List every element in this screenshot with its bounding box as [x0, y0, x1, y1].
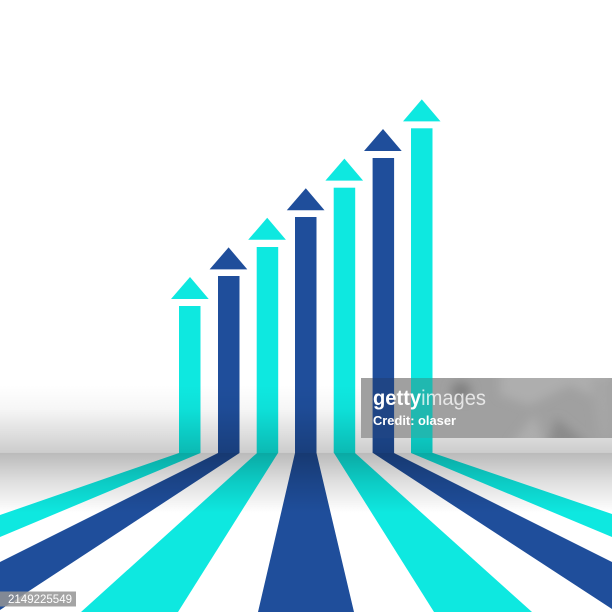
wall shadow: [0, 385, 612, 453]
watermark panel: [361, 378, 612, 438]
arrow 7: [403, 99, 440, 453]
watermark credit: Credit: olaser: [373, 413, 456, 428]
arrow 5: [325, 159, 363, 453]
arrow 1: [171, 277, 209, 453]
image id tag: 2149225549: [8, 592, 72, 606]
watermark over navy bar: [373, 378, 394, 438]
arrow 3: [248, 218, 286, 453]
arrow 6: [364, 129, 402, 453]
watermark over cyan bar: [411, 378, 432, 438]
arrow 4: [287, 188, 324, 453]
watermark logo: gettyimages: [373, 386, 486, 410]
floor shadow: [0, 453, 612, 513]
floor stripes: [0, 453, 612, 612]
arrow 2: [210, 247, 247, 453]
